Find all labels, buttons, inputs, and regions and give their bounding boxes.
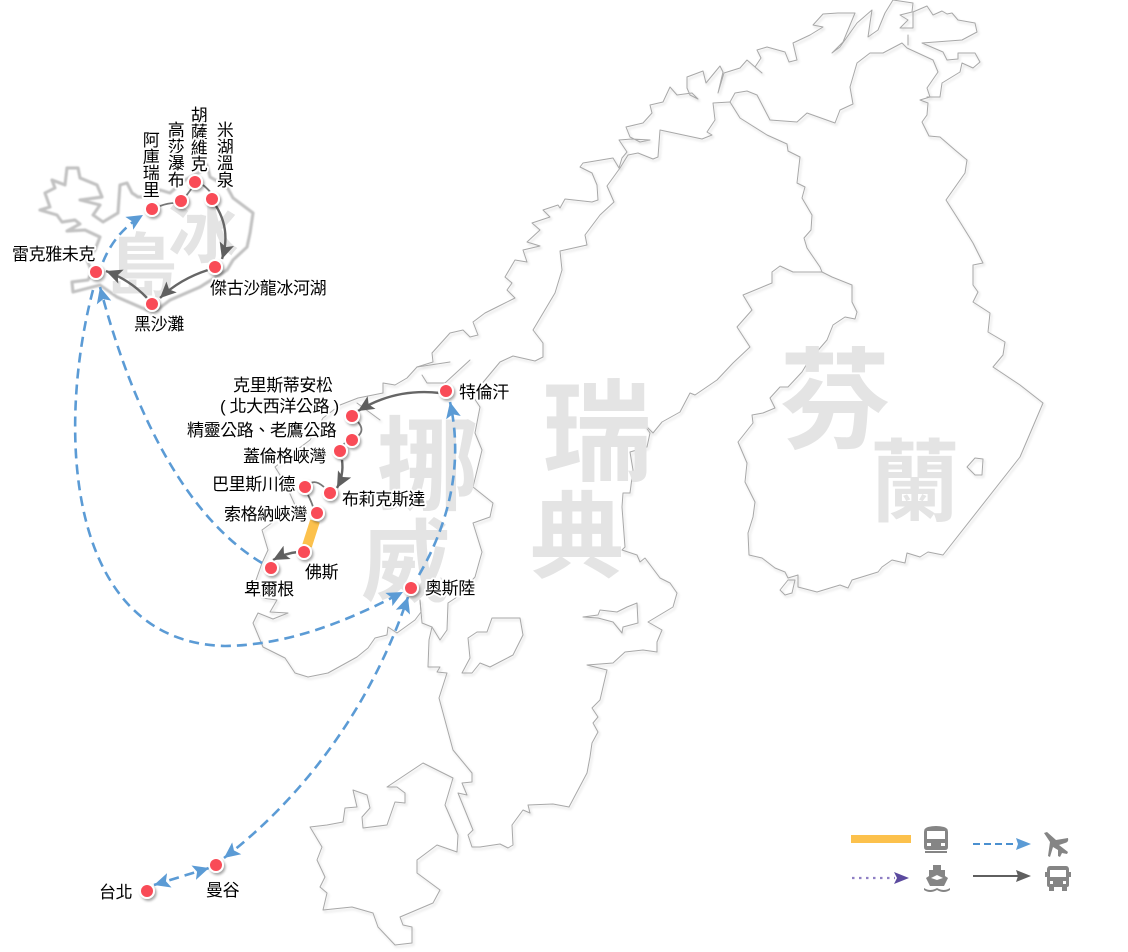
label: 胡薩維克: 薩 — [191, 123, 208, 142]
country name: 芬蘭: 芬 — [780, 341, 890, 464]
label: 阿庫瑞里: 阿 — [143, 131, 160, 150]
place labels — [12, 106, 509, 902]
label: 索格納峽灣: 索格納峽灣 — [224, 505, 307, 524]
label: 胡薩維克: 維 — [191, 139, 208, 158]
legend: flight arrow — [973, 838, 1031, 850]
label: 特倫汗: 特倫汗 — [459, 383, 509, 402]
label: 米湖溫泉: 米 — [217, 121, 234, 140]
label: 胡薩維克: 克 — [191, 155, 208, 174]
label: 布莉克斯達: 布莉克斯達 — [342, 490, 425, 509]
label: 高莎瀑布: 瀑 — [168, 154, 185, 173]
country name: 冰島: 島 — [107, 228, 177, 306]
label: 蓋倫格峽灣: 蓋倫格峽灣 — [243, 447, 326, 466]
icon: train — [924, 826, 948, 853]
label: 黑沙灘: 黑沙灘 — [134, 315, 184, 334]
label: 佛斯: 佛斯 — [305, 563, 339, 582]
country name: 冰島: 冰 — [168, 194, 238, 272]
label: 雷克雅未克: 雷克雅未克 — [12, 245, 95, 264]
label: 北大西洋公路: ( 北大西洋公路 ) — [220, 397, 339, 416]
label: 高莎瀑布: 布 — [168, 171, 184, 190]
country name: 瑞典: 瑞 — [542, 373, 652, 496]
flight routes — [75, 215, 455, 885]
country name: 瑞典: 典 — [530, 485, 624, 590]
legend — [851, 826, 1071, 892]
bus routes — [106, 185, 440, 560]
legend: train line — [851, 835, 911, 843]
icon: ship — [924, 865, 950, 892]
label: 卑爾根: 卑爾根 — [244, 580, 294, 599]
legend: bus arrow — [973, 870, 1031, 882]
label: 阿庫瑞里: 里 — [143, 181, 160, 200]
label: 胡薩維克: 胡 — [191, 106, 207, 125]
label: 米湖溫泉: 泉 — [217, 171, 234, 190]
stop markers — [88, 174, 454, 899]
country name: 瑞典 — [530, 373, 652, 590]
country name: 挪威: 挪 — [377, 410, 479, 524]
train route: 索格納峽灣 to 佛斯 — [307, 521, 315, 546]
icon: plane — [1044, 832, 1068, 857]
country name: 冰島 — [107, 194, 238, 306]
label: 台北: 台北 — [99, 883, 132, 902]
country name: 挪威: 威 — [361, 514, 451, 614]
label: 巴里斯川德: 巴里斯川德 — [212, 475, 295, 494]
label: 高莎瀑布: 莎 — [168, 138, 185, 157]
country name: 芬蘭: 蘭 — [870, 434, 960, 534]
label: 傑古沙龍冰河湖: 傑古沙龍冰河湖 — [210, 279, 326, 298]
label: 曼谷: 曼谷 — [206, 881, 240, 900]
label: 阿庫瑞里: 庫 — [143, 148, 160, 167]
country name: 挪威 — [361, 410, 479, 614]
icon: bus — [1045, 866, 1071, 891]
legend: ferry arrow — [852, 872, 909, 884]
map: Scandinavia outlines — [253, 0, 1043, 945]
label: 精靈公路、老鷹公路: 精靈公路、老鷹公路 — [187, 420, 337, 440]
label: 米湖溫泉: 湖 — [217, 138, 233, 157]
label: 阿庫瑞里: 瑞 — [143, 164, 160, 183]
map: Iceland outline — [40, 165, 253, 310]
label: 高莎瀑布: 高 — [168, 121, 184, 140]
label: 奧斯陸: 奧斯陸 — [425, 579, 475, 598]
country name: 芬蘭 — [780, 341, 960, 534]
label: 米湖溫泉: 溫 — [217, 154, 234, 173]
label: 克里斯蒂安松: 克里斯蒂安松 — [233, 376, 333, 395]
